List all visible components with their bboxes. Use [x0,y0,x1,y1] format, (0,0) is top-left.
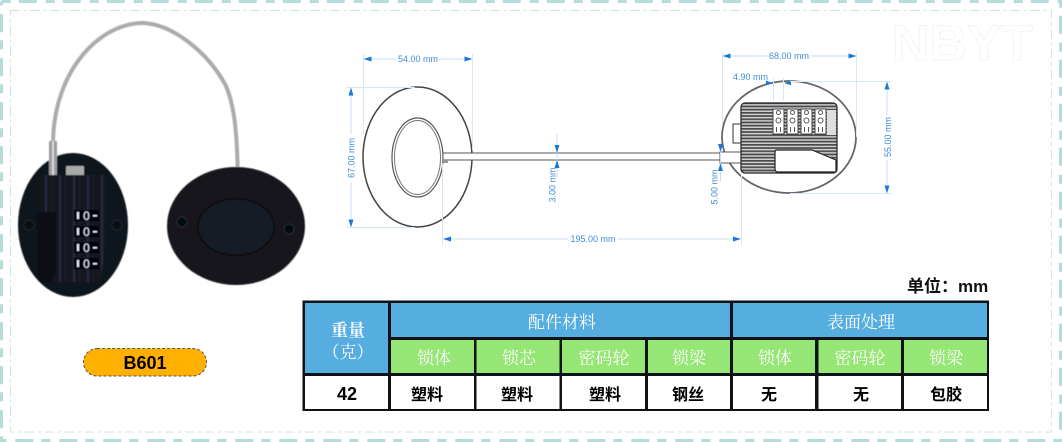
data row: 包胶 [930,385,962,404]
data row: 无 [761,387,777,404]
subheaders: 锁体 [417,348,451,368]
spec table [302,300,989,411]
dimension: 3.00 mm [548,134,560,203]
data row: 塑料 [501,386,533,404]
right plate [167,167,305,285]
model label pill [84,348,206,376]
left plate with combination lock: 0 [83,257,90,271]
dimension: 5.00 mm [710,143,723,205]
dimension: 68.00 mm: 68.00 mm [769,51,809,61]
subheaders: 锁芯 [502,348,537,368]
dimension: 195.00 mm [442,163,742,245]
header: weight [322,321,374,362]
dimension: 55.00 mm [790,82,893,194]
subheaders: 密码轮 [834,349,886,368]
left plate with combination lock: 0 [83,225,90,239]
dimension: 68.00 mm [722,51,856,137]
unit note: 单位：mm [907,276,988,296]
subheaders: 密码轮 [578,349,630,368]
dimension: 3.00 mm: 3.00 mm [548,167,558,203]
header: part materials: 配件材料 [528,313,596,332]
dimension: 4.90 mm: 4.90 mm [733,72,768,82]
dimension: 54.00 mm: 54.00 mm [398,54,438,64]
watermark NBYT: NBYT [892,15,1033,71]
data row: 塑料 [411,386,443,404]
drawing: right lock body [720,81,856,193]
subheaders: 锁梁 [672,348,707,368]
dimension: 5.00 mm: 5.00 mm [710,169,720,205]
data row: 无 [853,387,869,404]
dimension: 55.00 mm: 55.00 mm [883,117,893,157]
left plate with combination lock: 0 [83,241,90,255]
dimension: 54.00 mm [364,54,472,150]
subheaders: 锁梁 [929,348,964,368]
data row [337,384,962,404]
left plate with combination lock [18,141,128,297]
header: weight: 重量 [331,321,365,340]
header: weight: （克） [322,343,374,362]
table background and grid [302,300,989,411]
drawing: left plate [363,87,472,227]
header: surface treatment: 表面处理 [827,313,895,332]
data row: 42 [337,384,357,404]
data row: 塑料 [589,386,621,404]
dimension: 195.00 mm: 195.00 mm [570,234,616,244]
steel cable [53,23,238,199]
dimension: 67.00 mm: 67.00 mm [346,138,356,178]
drawing: cable [443,153,720,163]
subheaders: 锁体 [758,348,792,368]
technical drawing [346,51,893,245]
data row: 钢丝 [672,386,704,404]
model label pill: B601 [123,353,167,373]
product photo: cable lock [18,23,305,297]
dimension: 4.90 mm [733,72,791,101]
subheaders [417,348,964,368]
dimension: 67.00 mm [346,88,415,228]
left plate with combination lock: 0 [83,209,90,223]
